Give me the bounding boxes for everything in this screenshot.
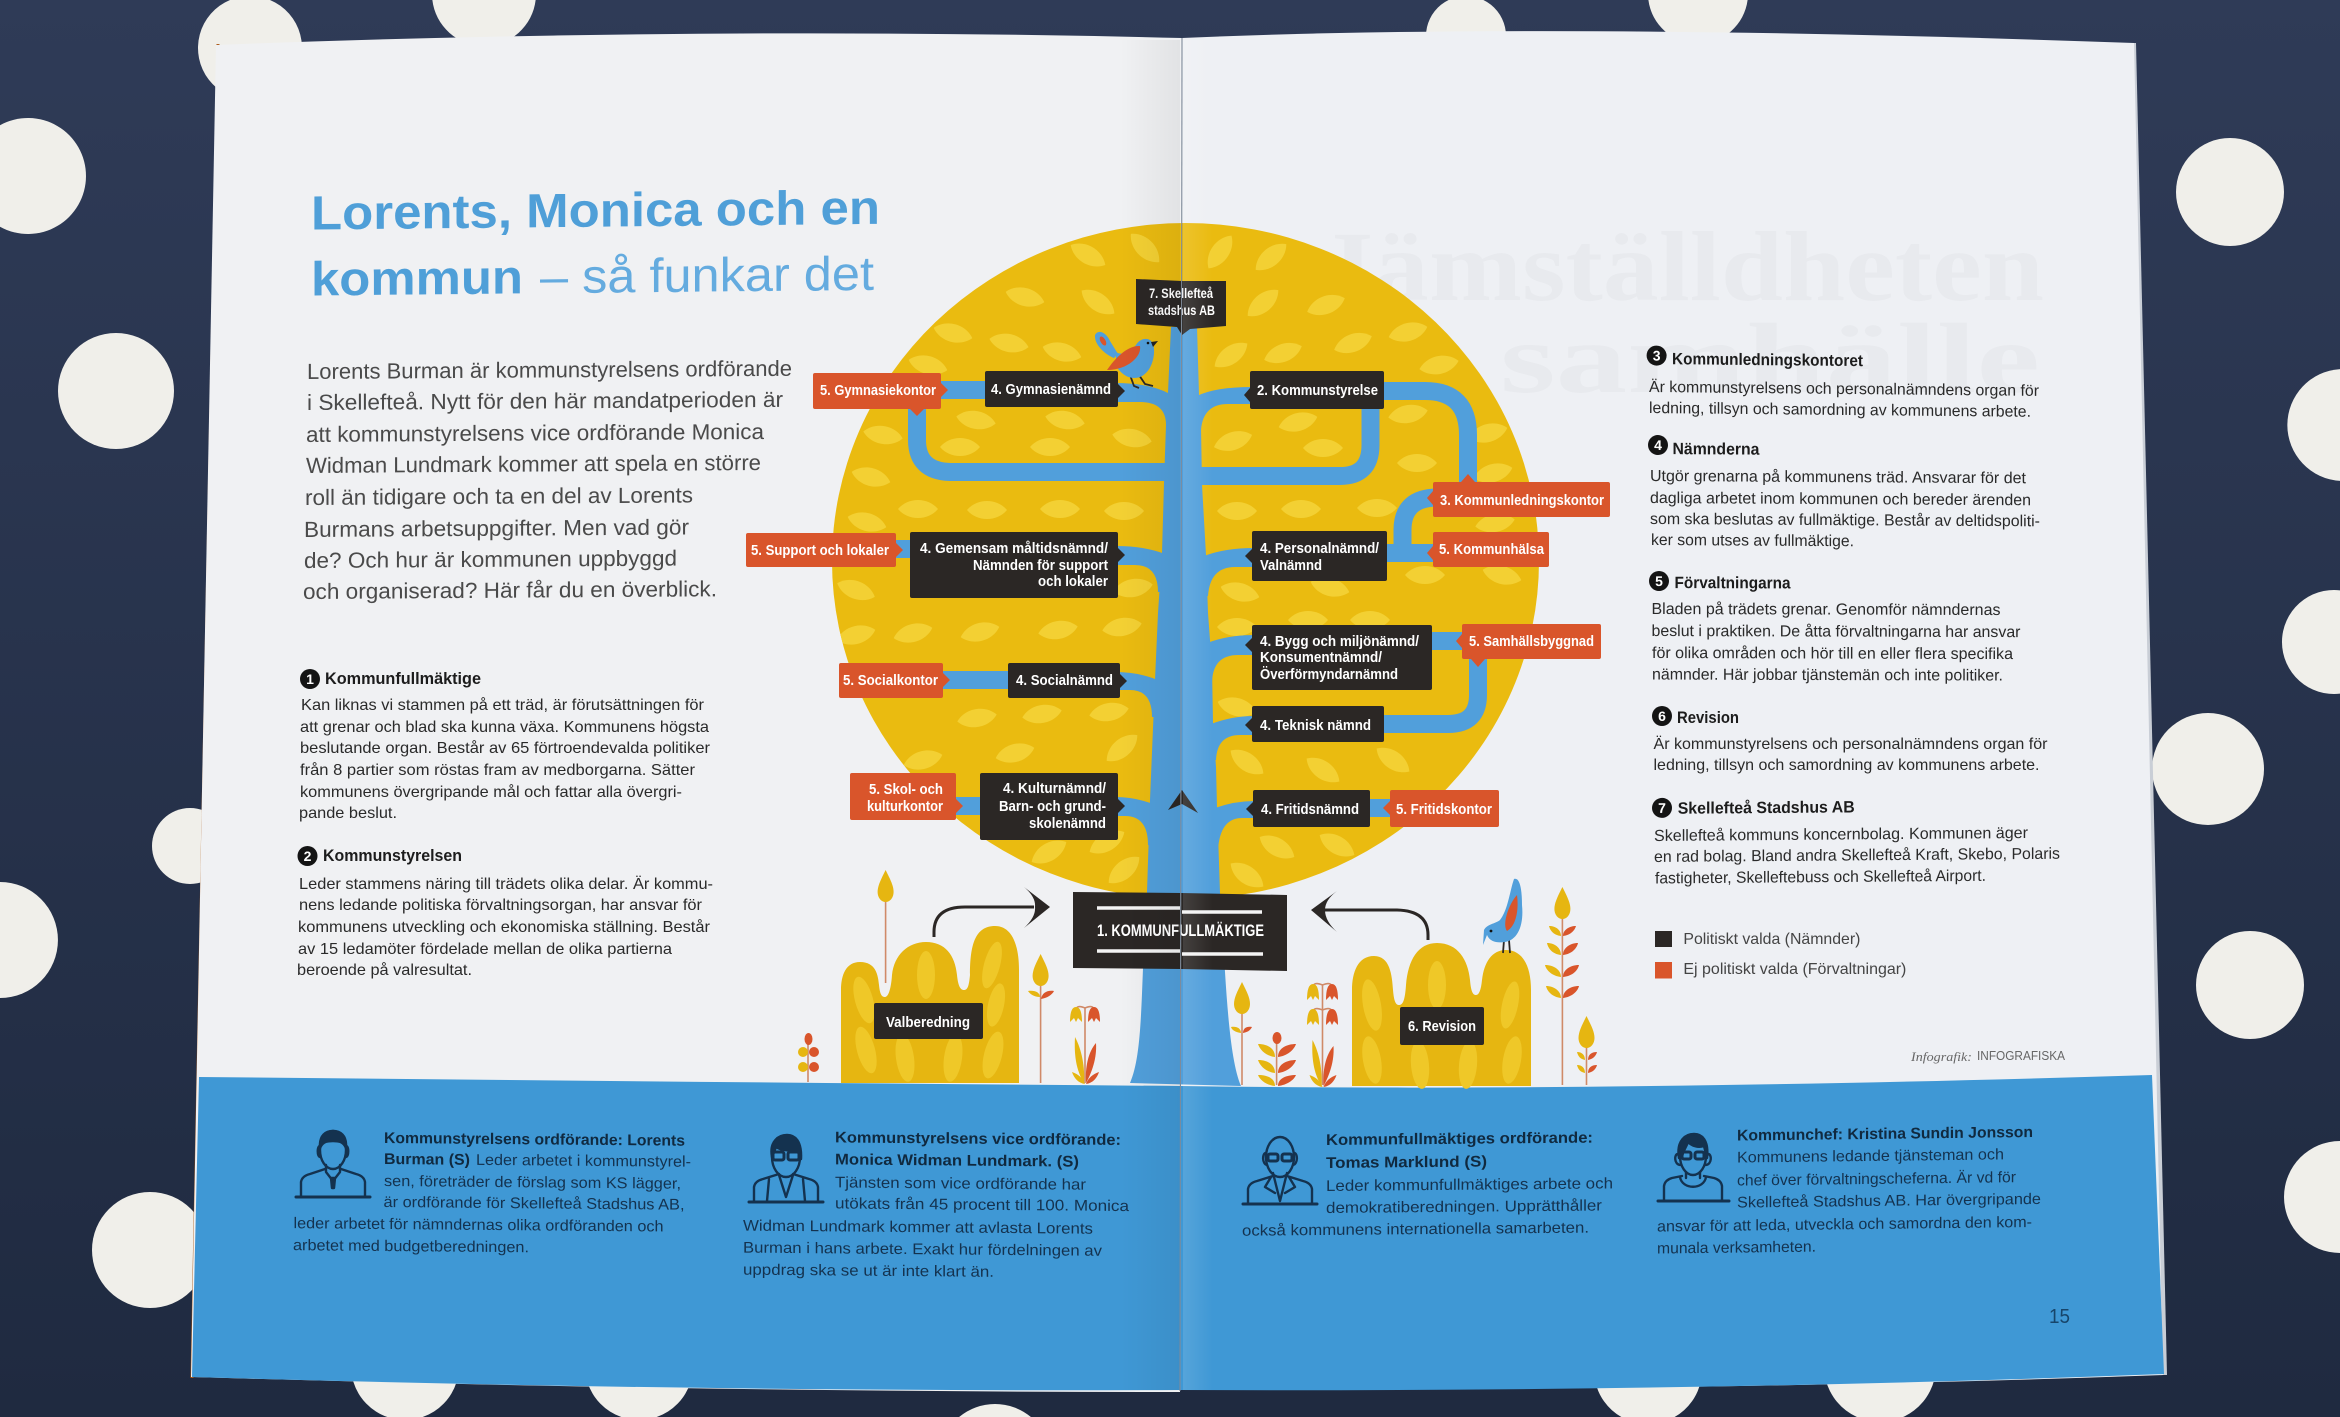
panel text: Monica Widman Lundmark: Widman Lundmark kommer att avlasta Lorents xyxy=(743,1218,1093,1238)
panel text: Kristina Sundin Jonsson: Skellefteå Stadshus AB. Har övergripande xyxy=(1737,1191,2041,1212)
panel text: Lorents Burman: är ordförande för Skellefteå Stadshus AB, xyxy=(384,1194,685,1214)
text block 2: Kommunstyrelsen: nens ledande politiska förvaltningsorgan, har ansvar för xyxy=(299,897,703,914)
panel text: Kristina Sundin Jonsson xyxy=(1657,1124,2041,1258)
node: 5. Fritidskontor xyxy=(1383,790,1499,827)
text block 6: Revision xyxy=(1652,706,2048,774)
credit: Infografik: Infografik: xyxy=(1910,1049,1972,1064)
text block 2: Kommunstyrelsen: Leder stammens näring till trädets olika delar. Är kommu- xyxy=(299,875,713,893)
credit: Infografik: INFOGRAFISKA xyxy=(1977,1049,2066,1063)
intro paragraph: och organiserad? Här får du en överblick. xyxy=(303,576,717,604)
text block 5: Förvaltningarna: för olika områden och hör till en eller flera specifika xyxy=(1652,644,2013,663)
text block 7: Skellefteå Stadshus AB xyxy=(1652,795,2060,887)
icon: bald man with glasses xyxy=(1243,1137,1317,1204)
node: 4. Gymnasienämnd xyxy=(985,371,1125,407)
text block 1: Kommunfullmäktige: från 8 partier som röstas fram av medborgarna. Sätter xyxy=(300,761,696,779)
arrow: Revision to Kommunfullmäktige xyxy=(1311,891,1428,940)
node: 4. Teknisk nämnd: 4. Teknisk nämnd xyxy=(1260,718,1371,734)
node: 4. Gemensam måltidsnämnd: 4. Gemensam måltidsnämnd/ xyxy=(920,541,1108,557)
bush with Valberedning label: Valberedning xyxy=(886,1015,970,1031)
node: 5. Socialkontor xyxy=(839,663,950,698)
panel text: Lorents Burman: Leder arbetet i kommunstyrel- xyxy=(476,1152,691,1171)
node: 5. Samhällsbyggnad xyxy=(1456,624,1601,667)
text block 4: Nämnderna: Utgör grenarna på kommunens träd. Ansvarar för det xyxy=(1650,467,2027,487)
panel text: Kristina Sundin Jonsson: Kommunchef: Kristina Sundin Jonsson xyxy=(1737,1124,2033,1145)
text block 2: Kommunstyrelsen: kommunens utveckling och ekonomiska ställning. Består xyxy=(298,918,711,936)
text block 5: Förvaltningarna: beslut i praktiken. De åtta förvaltningarna har ansvar xyxy=(1652,622,2021,641)
node: 4. Kulturnämnd: Barn- och grund- xyxy=(999,799,1106,815)
bird on Revision bush xyxy=(1483,879,1522,953)
node: 4. Personalnämnd xyxy=(1245,531,1387,581)
panel text: Monica Widman Lundmark xyxy=(743,1129,1129,1282)
text block 4: Nämnderna: Nämnderna xyxy=(1672,440,1760,459)
node: 2. Kommunstyrelse: 2. Kommunstyrelse xyxy=(1257,383,1378,399)
show-through from the next page: samhälle xyxy=(1500,303,2040,414)
panel text: Monica Widman Lundmark: Kommunstyrelsens vice ordförande: xyxy=(835,1129,1121,1149)
panel text: Lorents Burman: Kommunstyrelsens ordförande: Lorents xyxy=(384,1130,685,1150)
intro paragraph: Lorents Burman är kommunstyrelsens ordförande xyxy=(307,356,792,384)
tree trunk and blue branches xyxy=(896,327,1478,1086)
text block 1: Kommunfullmäktige xyxy=(299,669,711,822)
node: 4. Teknisk nämnd xyxy=(1245,706,1384,742)
icon: woman with glasses xyxy=(749,1135,823,1202)
title: Lorents, Monica och en xyxy=(311,182,880,240)
node: 5. Gymnasiekontor xyxy=(813,373,948,416)
node: 4. Socialnämnd xyxy=(1008,663,1127,698)
tree crown with leaves xyxy=(832,223,1539,899)
node: 4. Bygg och miljönämnd: Överförmyndarnämnd xyxy=(1260,666,1398,683)
panel text: Tomas Marklund: Tomas Marklund (S) xyxy=(1326,1154,1487,1172)
central box: 1. Kommunfullmäktige: 1. KOMMUNFULLMÄKTIGE xyxy=(1097,921,1264,940)
text block 3: Kommunledningskontoret xyxy=(1647,345,2040,421)
text block 7: Skellefteå Stadshus AB: en rad bolag. Bland andra Skellefteå Kraft, Skebo, Polaris xyxy=(1654,845,2060,866)
node: 5. Skol- och kulturkontor: 5. Skol- och xyxy=(869,782,943,798)
show-through from the next page: Jämställdheten xyxy=(1317,211,2044,322)
text block 3: Kommunledningskontoret: 3 xyxy=(1653,348,1661,364)
intro paragraph: Widman Lundmark kommer att spela en större xyxy=(306,450,761,478)
arrow: Valberedning to Kommunfullmäktige xyxy=(934,887,1050,937)
text block 6: Revision: 6 xyxy=(1658,708,1666,724)
plants: right meadow xyxy=(1231,887,1597,1087)
node: 5. Socialkontor: 5. Socialkontor xyxy=(843,673,938,689)
credit: Infografik xyxy=(1910,1049,2066,1064)
node: 4. Gemensam måltidsnämnd xyxy=(910,532,1125,598)
legend xyxy=(1655,931,1906,978)
intro paragraph: att kommunstyrelsens vice ordförande Monica xyxy=(306,419,765,447)
panel text: Lorents Burman: sen, företräder de förslag som KS lägger, xyxy=(384,1173,681,1193)
text block 1: Kommunfullmäktige: beslutande organ. Består av 65 förtroendevalda politiker xyxy=(300,739,711,757)
bush with 6. Revision label: 6. Revision xyxy=(1408,1019,1476,1035)
text block 4: Nämnderna: dagliga arbetet inom kommunen och bereder ärenden xyxy=(1650,490,2031,509)
text block 5: Förvaltningarna xyxy=(1649,571,2021,685)
panel text: Kristina Sundin Jonsson: Kommunens ledande tjänsteman och xyxy=(1737,1146,2004,1167)
panel text: Tomas Marklund: Leder kommunfullmäktiges arbete och xyxy=(1326,1175,1613,1195)
node: 4. Personalnämnd: Valnämnd xyxy=(1260,558,1322,574)
text block 7: Skellefteå Stadshus AB: 7 xyxy=(1658,800,1666,816)
node: 4. Fritidsnämnd xyxy=(1246,790,1370,827)
node: 4. Gemensam måltidsnämnd: och lokaler xyxy=(1038,574,1108,590)
node: 3. Kommunledningskontor: 3. Kommunledningskontor xyxy=(1440,493,1604,509)
panel text: Monica Widman Lundmark: uppdrag ska se ut är inte klart än. xyxy=(743,1262,994,1281)
node: 4. Kulturnämnd: skolenämnd xyxy=(1029,816,1106,832)
panel: left page xyxy=(191,33,1182,1392)
panel text: Lorents Burman: Burman (S) xyxy=(384,1151,470,1169)
panel text: Kristina Sundin Jonsson: chef över förvaltningscheferna. Är vd för xyxy=(1737,1169,2016,1190)
intro paragraph: de? Och hur är kommunen uppbyggd xyxy=(304,546,677,573)
text block 1: Kommunfullmäktige: pande beslut. xyxy=(299,805,397,822)
text block 3: Kommunledningskontoret: Är kommunstyrelsens och personalnämndens organ för xyxy=(1649,378,2040,400)
text block 4: Nämnderna: 4 xyxy=(1654,437,1662,453)
text block 3: Kommunledningskontoret: Kommunledningskontoret xyxy=(1672,350,1863,370)
panel text: Monica Widman Lundmark: Monica Widman Lundmark. (S) xyxy=(835,1151,1079,1171)
legend: Politiskt valda (Nämnder) xyxy=(1683,931,1860,948)
panel text: Tomas Marklund xyxy=(1242,1129,1613,1240)
panel: right page xyxy=(1180,31,2163,1389)
panel text: Lorents Burman: leder arbetet för nämndernas olika ordföranden och xyxy=(294,1215,663,1236)
node: 5. Support och lokaler: 5. Support och lokaler xyxy=(751,543,889,559)
text block 5: Förvaltningarna: Förvaltningarna xyxy=(1674,574,1791,592)
node: 5. Skol- och kulturkontor: kulturkontor xyxy=(867,799,943,815)
node: 4. Personalnämnd: 4. Personalnämnd/ xyxy=(1260,541,1379,557)
text block 2: Kommunstyrelsen: beroende på valresultat. xyxy=(297,961,472,979)
icon: man with short hair xyxy=(296,1131,370,1197)
node: 4. Bygg och miljönämnd xyxy=(1245,625,1432,690)
text block 6: Revision: Är kommunstyrelsens och personalnämndens organ för xyxy=(1654,735,2048,753)
title: kommun xyxy=(311,251,523,306)
intro paragraph xyxy=(303,356,792,604)
plants: left meadow xyxy=(798,870,1100,1084)
text block 2: Kommunstyrelsen: Kommunstyrelsen xyxy=(323,847,462,865)
node: 5. Gymnasiekontor: 5. Gymnasiekontor xyxy=(820,383,936,399)
intro paragraph: Burmans arbetsuppgifter. Men vad gör xyxy=(304,514,689,542)
text block 1: Kommunfullmäktige: kommunens övergripande mål och fattar alla övergri- xyxy=(300,783,682,801)
arrowhead on trunk xyxy=(1168,790,1198,813)
panel text: Kristina Sundin Jonsson: munala verksamheten. xyxy=(1657,1239,1816,1258)
title: – så funkar det xyxy=(540,248,874,304)
spine fold xyxy=(1120,38,1213,1391)
text block 6: Revision: ledning, tillsyn och samordning av kommunens arbete. xyxy=(1654,757,2040,774)
node: 7. Skellefteå Stadshus AB: 7. Skellefteå xyxy=(1149,286,1213,301)
node: 4. Bygg och miljönämnd: 4. Bygg och miljönämnd/ xyxy=(1260,634,1419,650)
node: 5. Kommunhälsa: 5. Kommunhälsa xyxy=(1439,542,1545,558)
text block 5: Förvaltningarna: nämnder. Här jobbar tjänstemän och inte politiker. xyxy=(1652,667,2003,685)
panel text: Tomas Marklund: också kommunens internationella samarbeten. xyxy=(1242,1220,1589,1240)
legend: Ej politiskt valda (Förvaltningar) xyxy=(1683,961,1906,978)
bird on left branch xyxy=(1095,332,1158,388)
panel text: Lorents Burman: arbetet med budgetberedningen. xyxy=(293,1237,529,1256)
title xyxy=(311,182,880,306)
node: 2. Kommunstyrelse xyxy=(1244,371,1384,409)
text block 5: Förvaltningarna: Bladen på trädets grenar. Genomför nämndernas xyxy=(1652,600,2001,619)
magazine page stack edges xyxy=(192,43,2165,1378)
panel text: Tomas Marklund: demokratiberedningen. Upprätthåller xyxy=(1326,1197,1602,1217)
text block 4: Nämnderna: ker som utses av fullmäktige. xyxy=(1651,532,1854,550)
text block 7: Skellefteå Stadshus AB: Skellefteå kommuns koncernbolag. Kommunen äger xyxy=(1654,824,2029,845)
text block 7: Skellefteå Stadshus AB: Skellefteå Stadshus AB xyxy=(1678,798,1855,818)
node: 4. Gemensam måltidsnämnd: Nämnden för support xyxy=(973,558,1108,574)
text block 6: Revision: Revision xyxy=(1677,709,1739,727)
node: 5. Kommunhälsa xyxy=(1427,532,1549,567)
panel: blue footer band xyxy=(192,1075,2164,1390)
text block 1: Kommunfullmäktige: Kommunfullmäktige xyxy=(325,670,481,688)
page number: 15 xyxy=(2049,1306,2070,1328)
text block 7: Skellefteå Stadshus AB: fastigheter, Skelleftebuss och Skellefteå Airport. xyxy=(1655,867,1986,887)
central box: 1. Kommunfullmäktige xyxy=(1073,892,1287,971)
text block 3: Kommunledningskontoret: ledning, tillsyn och samordning av kommunens arbete. xyxy=(1649,400,2031,421)
panel text: Monica Widman Lundmark: utökats från 45 procent till 100. Monica xyxy=(835,1195,1129,1215)
intro paragraph: i Skellefteå. Nytt för den här mandatperioden är xyxy=(307,387,783,415)
node: 4. Bygg och miljönämnd: Konsumentnämnd/ xyxy=(1260,650,1382,666)
text block 1: Kommunfullmäktige: Kan liknas vi stammen på ett träd, är förutsättningen för xyxy=(301,696,705,714)
panel text: Monica Widman Lundmark: Tjänsten som vice ordförande har xyxy=(835,1174,1086,1194)
node: 3. Kommunledningskontor xyxy=(1427,474,1610,517)
icon: woman with dark hair and glasses xyxy=(1658,1134,1729,1201)
node: 5. Samhällsbyggnad: 5. Samhällsbyggnad xyxy=(1469,634,1594,650)
node: 5. Fritidskontor: 5. Fritidskontor xyxy=(1396,802,1492,818)
text block 2: Kommunstyrelsen: 2 xyxy=(304,848,312,864)
show-through from the next page xyxy=(1317,211,2044,414)
text block 4: Nämnderna: som ska beslutas av fullmäktige. Består av deltidspoliti- xyxy=(1650,510,2040,530)
text block 4: Nämnderna xyxy=(1648,435,2040,551)
panel text: Lorents Burman xyxy=(293,1129,691,1258)
node: 4. Gymnasienämnd: 4. Gymnasienämnd xyxy=(991,382,1111,398)
node: 4. Kulturnämnd xyxy=(980,773,1125,840)
intro paragraph: roll än tidigare och ta en del av Lorents xyxy=(305,482,693,510)
node: 5. Skol- och kulturkontor xyxy=(850,773,963,820)
text block 1: Kommunfullmäktige: att grenar och blad ska kunna växa. Kommunens högsta xyxy=(300,719,709,736)
node: 7. Skellefteå Stadshus AB xyxy=(1136,279,1226,335)
bush with Valberedning label xyxy=(841,926,1019,1083)
node: 5. Support och lokaler xyxy=(746,533,903,567)
node: 4. Kulturnämnd: 4. Kulturnämnd/ xyxy=(1003,781,1106,797)
node: 4. Socialnämnd: 4. Socialnämnd xyxy=(1016,673,1113,689)
text block 5: Förvaltningarna: 5 xyxy=(1655,573,1663,589)
panel text: Monica Widman Lundmark: Burman i hans arbete. Exakt hur fördelningen av xyxy=(743,1240,1102,1260)
node: 4. Fritidsnämnd: 4. Fritidsnämnd xyxy=(1261,802,1359,818)
text block 2: Kommunstyrelsen: av 15 ledamöter fördelade mellan de olika partierna xyxy=(298,941,672,958)
panel text: Tomas Marklund: Kommunfullmäktiges ordförande: xyxy=(1326,1130,1593,1149)
panel text: Kristina Sundin Jonsson: ansvar för att leda, utveckla och samordna den kom- xyxy=(1657,1214,2032,1236)
text block 2: Kommunstyrelsen xyxy=(297,846,713,979)
node: 7. Skellefteå Stadshus AB: stadshus AB xyxy=(1148,303,1215,318)
text block 1: Kommunfullmäktige: 1 xyxy=(306,671,314,687)
bush with 6. Revision label xyxy=(1352,943,1531,1090)
